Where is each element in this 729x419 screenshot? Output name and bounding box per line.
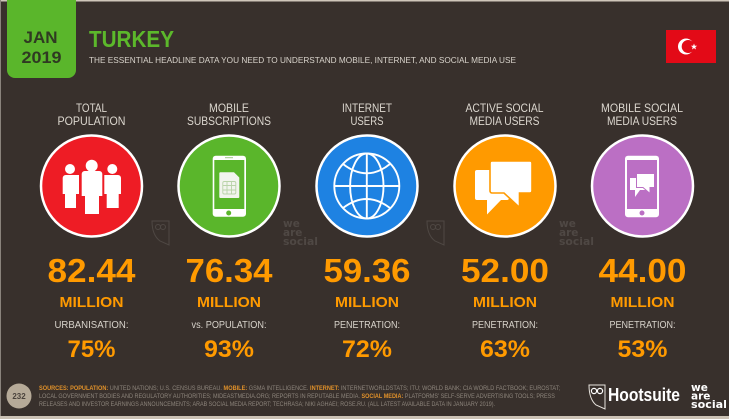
logo: Hootsuite: Hootsuite [608,385,680,405]
heading: total population [58,101,126,128]
label: penetration: PENETRATION: [610,320,676,331]
page number badge [6,384,32,408]
value: 52.00 million: 52.00 [461,252,549,289]
panel: internet users [316,101,418,363]
watermark: we are social right: social [559,236,594,248]
label: urbanisation: URBANISATION: [54,320,128,331]
page number badge: 232 [12,392,26,401]
heading: mobile subscriptions: SUBSCRIPTIONS [187,114,271,128]
unit: MILLION [610,294,674,311]
heading: internet users: INTERNET [342,101,393,115]
date badge: 2019 [22,48,62,67]
watermark: owl right [427,221,444,245]
logo: we are social: social [691,399,727,411]
heading: mobile social media users [601,101,683,128]
heading: internet users [342,101,393,128]
watermark: we are social left: are [283,227,302,239]
unit: MILLION [197,294,261,311]
value: 93%: 93% [204,336,254,363]
logo: we are social [691,382,727,411]
watermark: we are social right: we [559,218,576,230]
value: 75%: 75% [68,336,116,363]
heading: mobile social media users: MOBILE SOCIAL [601,101,683,115]
icon: phone with SIM card in green circle [178,136,280,236]
sources text: LOCAL GOVERNMENT BODIES AND REGULATORY AUTHORITIES; MIDEASTMEDIA.ORG; REPORTS IN REPUTABLE MEDIA. SOCIAL MEDIA: PLATFORMS' SELF-SERVE ADVERTISING TOOLS; PRESS [39,394,555,400]
value: 59.36 million: 59.36 [324,252,410,289]
date badge [7,0,76,78]
date badge: JAN [24,28,58,47]
unit: MILLION [335,294,399,311]
heading: mobile subscriptions: MOBILE [209,101,249,115]
unit: MILLION [473,294,537,311]
heading: active social media users [466,101,544,128]
heading: mobile social media users: MEDIA USERS [607,114,677,128]
value: 63%: 63% [480,336,530,363]
watermark: we are social right [559,218,594,248]
value: 82.44 million: 82.44 [48,252,136,289]
sources text: SOURCES: POPULATION: UNITED NATIONS; U.S. CENSUS BUREAU. MOBILE: GSMA INTELLIGENCE. INTERNET: INTERNETWORLDSTATS; ITU; WORLD BANK; CIA WORLD FACTBOOK; EUROSTAT; [39,386,560,392]
heading: internet users: USERS [350,114,384,128]
heading: active social media users: MEDIA USERS [470,114,540,128]
watermark: we are social left: social [283,236,318,248]
subtitle: THE ESSENTIAL HEADLINE DATA YOU NEED TO UNDERSTAND MOBILE, INTERNET, AND SOCIAL MEDIA USE [89,55,516,65]
label: vs population: vs. POPULATION: [192,320,266,331]
sources text: RELEASES AND INVESTOR EARNINGS ANNOUNCEMENTS; ARAB SOCIAL MEDIA REPORT; TECHRASA; NIKI AGHAEI; ROSE.RU. (ALL LATEST AVAILABLE DATA IN JANUARY 2019). [39,402,495,408]
value: 76.34 million: 76.34 [186,252,273,289]
icon: Turkish flag [666,30,716,63]
panel: mobile social media users [592,101,693,363]
icon: people in red circle [41,136,142,236]
value: 72%: 72% [342,336,392,363]
watermark: we are social right: are [559,227,578,239]
panel: mobile subscriptions [178,101,280,363]
unit: MILLION [60,294,124,311]
icon: chat bubbles in orange circle [454,136,556,236]
value: 44.00 million: 44.00 [598,252,686,289]
watermark: we are social left [283,218,318,248]
label: penetration: PENETRATION: [334,320,400,331]
icon: phone with chat bubbles in purple circle [592,136,693,236]
heading: active social media users: ACTIVE SOCIAL [466,101,544,115]
label: penetration: PENETRATION: [472,320,538,331]
panel: active social media users [454,101,556,363]
watermark: we are social left: we [283,218,300,230]
value: 53%: 53% [618,336,668,363]
logo: we are social: we [691,382,708,394]
sources text [39,386,560,408]
heading: total population: POPULATION [58,114,126,128]
logo: we are social: are [691,390,710,402]
watermark: owl left [152,221,169,245]
icon: globe in blue circle [316,136,418,236]
logo: Hootsuite [589,385,680,409]
heading: mobile subscriptions [187,101,271,128]
panel: total population [41,101,142,363]
title: TURKEY [89,26,174,52]
heading: total population: TOTAL [76,101,107,115]
